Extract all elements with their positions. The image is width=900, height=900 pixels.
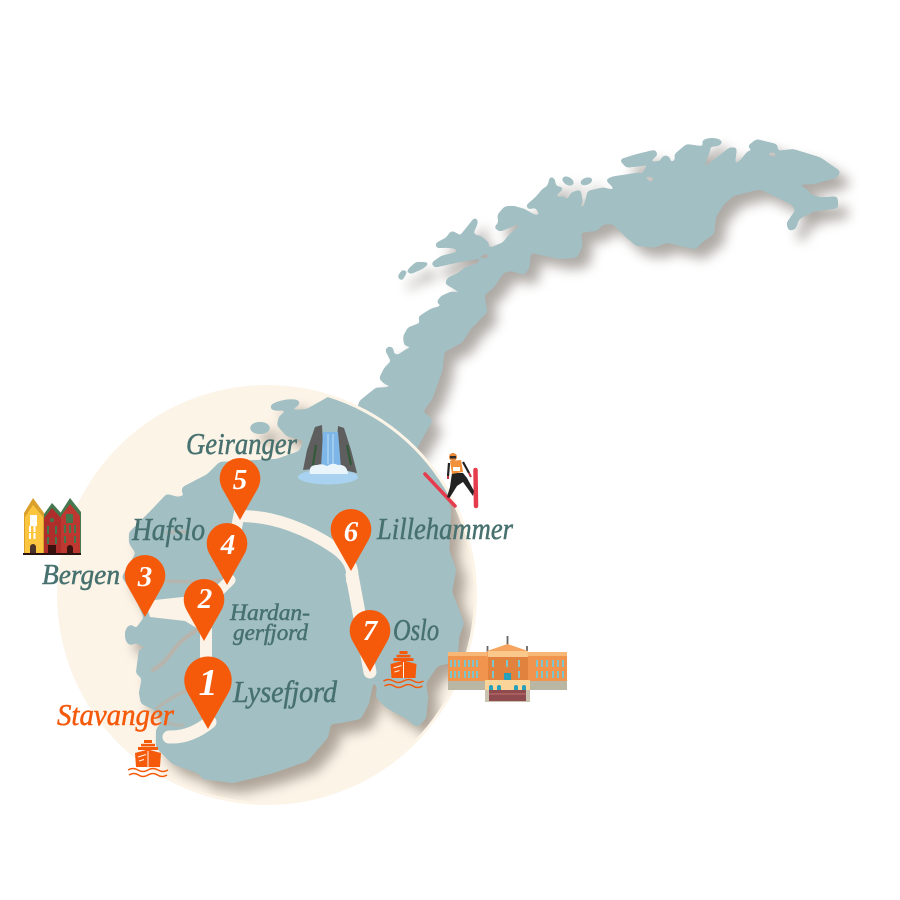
pin 4 xyxy=(207,523,247,585)
pin 7: 7 xyxy=(363,615,379,647)
label: Oslo: Oslo xyxy=(393,612,439,647)
pin 1 xyxy=(184,656,232,729)
icon: Bergen houses xyxy=(23,498,81,555)
pin 3 xyxy=(125,555,165,617)
fjords xyxy=(153,531,220,725)
map: southern Norway xyxy=(123,385,480,782)
label: Geiranger: Geiranger xyxy=(186,426,298,461)
icon: waterfall xyxy=(298,425,358,484)
pin 2 xyxy=(184,579,224,641)
pin 3: 3 xyxy=(137,561,152,593)
pin 6 xyxy=(331,509,371,571)
pin 1: 1 xyxy=(198,662,218,704)
label: Lysefjord: Lysefjord xyxy=(232,674,337,709)
pin 5 xyxy=(220,458,260,520)
pin 4: 4 xyxy=(220,529,235,561)
pin 5: 5 xyxy=(233,464,247,496)
label: Hardangerfjord: Hardan- xyxy=(229,600,310,625)
label: Bergen: Bergen xyxy=(42,559,120,591)
label: Stavanger: Stavanger xyxy=(57,697,175,732)
label: Hardangerfjord xyxy=(229,600,310,645)
icon: ship Oslo xyxy=(384,651,424,688)
label: Lillehammer: Lillehammer xyxy=(376,511,514,546)
route xyxy=(145,510,370,737)
icon: Oslo royal palace xyxy=(448,636,567,702)
pin 7 xyxy=(350,610,390,672)
pin 2: 2 xyxy=(197,583,212,615)
icon: ship Stavanger xyxy=(128,740,168,776)
label: Hafslo: Hafslo xyxy=(131,511,205,547)
pin 6: 6 xyxy=(344,516,359,548)
cream circle background xyxy=(57,385,477,805)
icon: ski jumper xyxy=(425,453,476,506)
label: Hardangerfjord: gerfjord xyxy=(233,620,308,645)
map: northern Norway xyxy=(347,139,839,453)
